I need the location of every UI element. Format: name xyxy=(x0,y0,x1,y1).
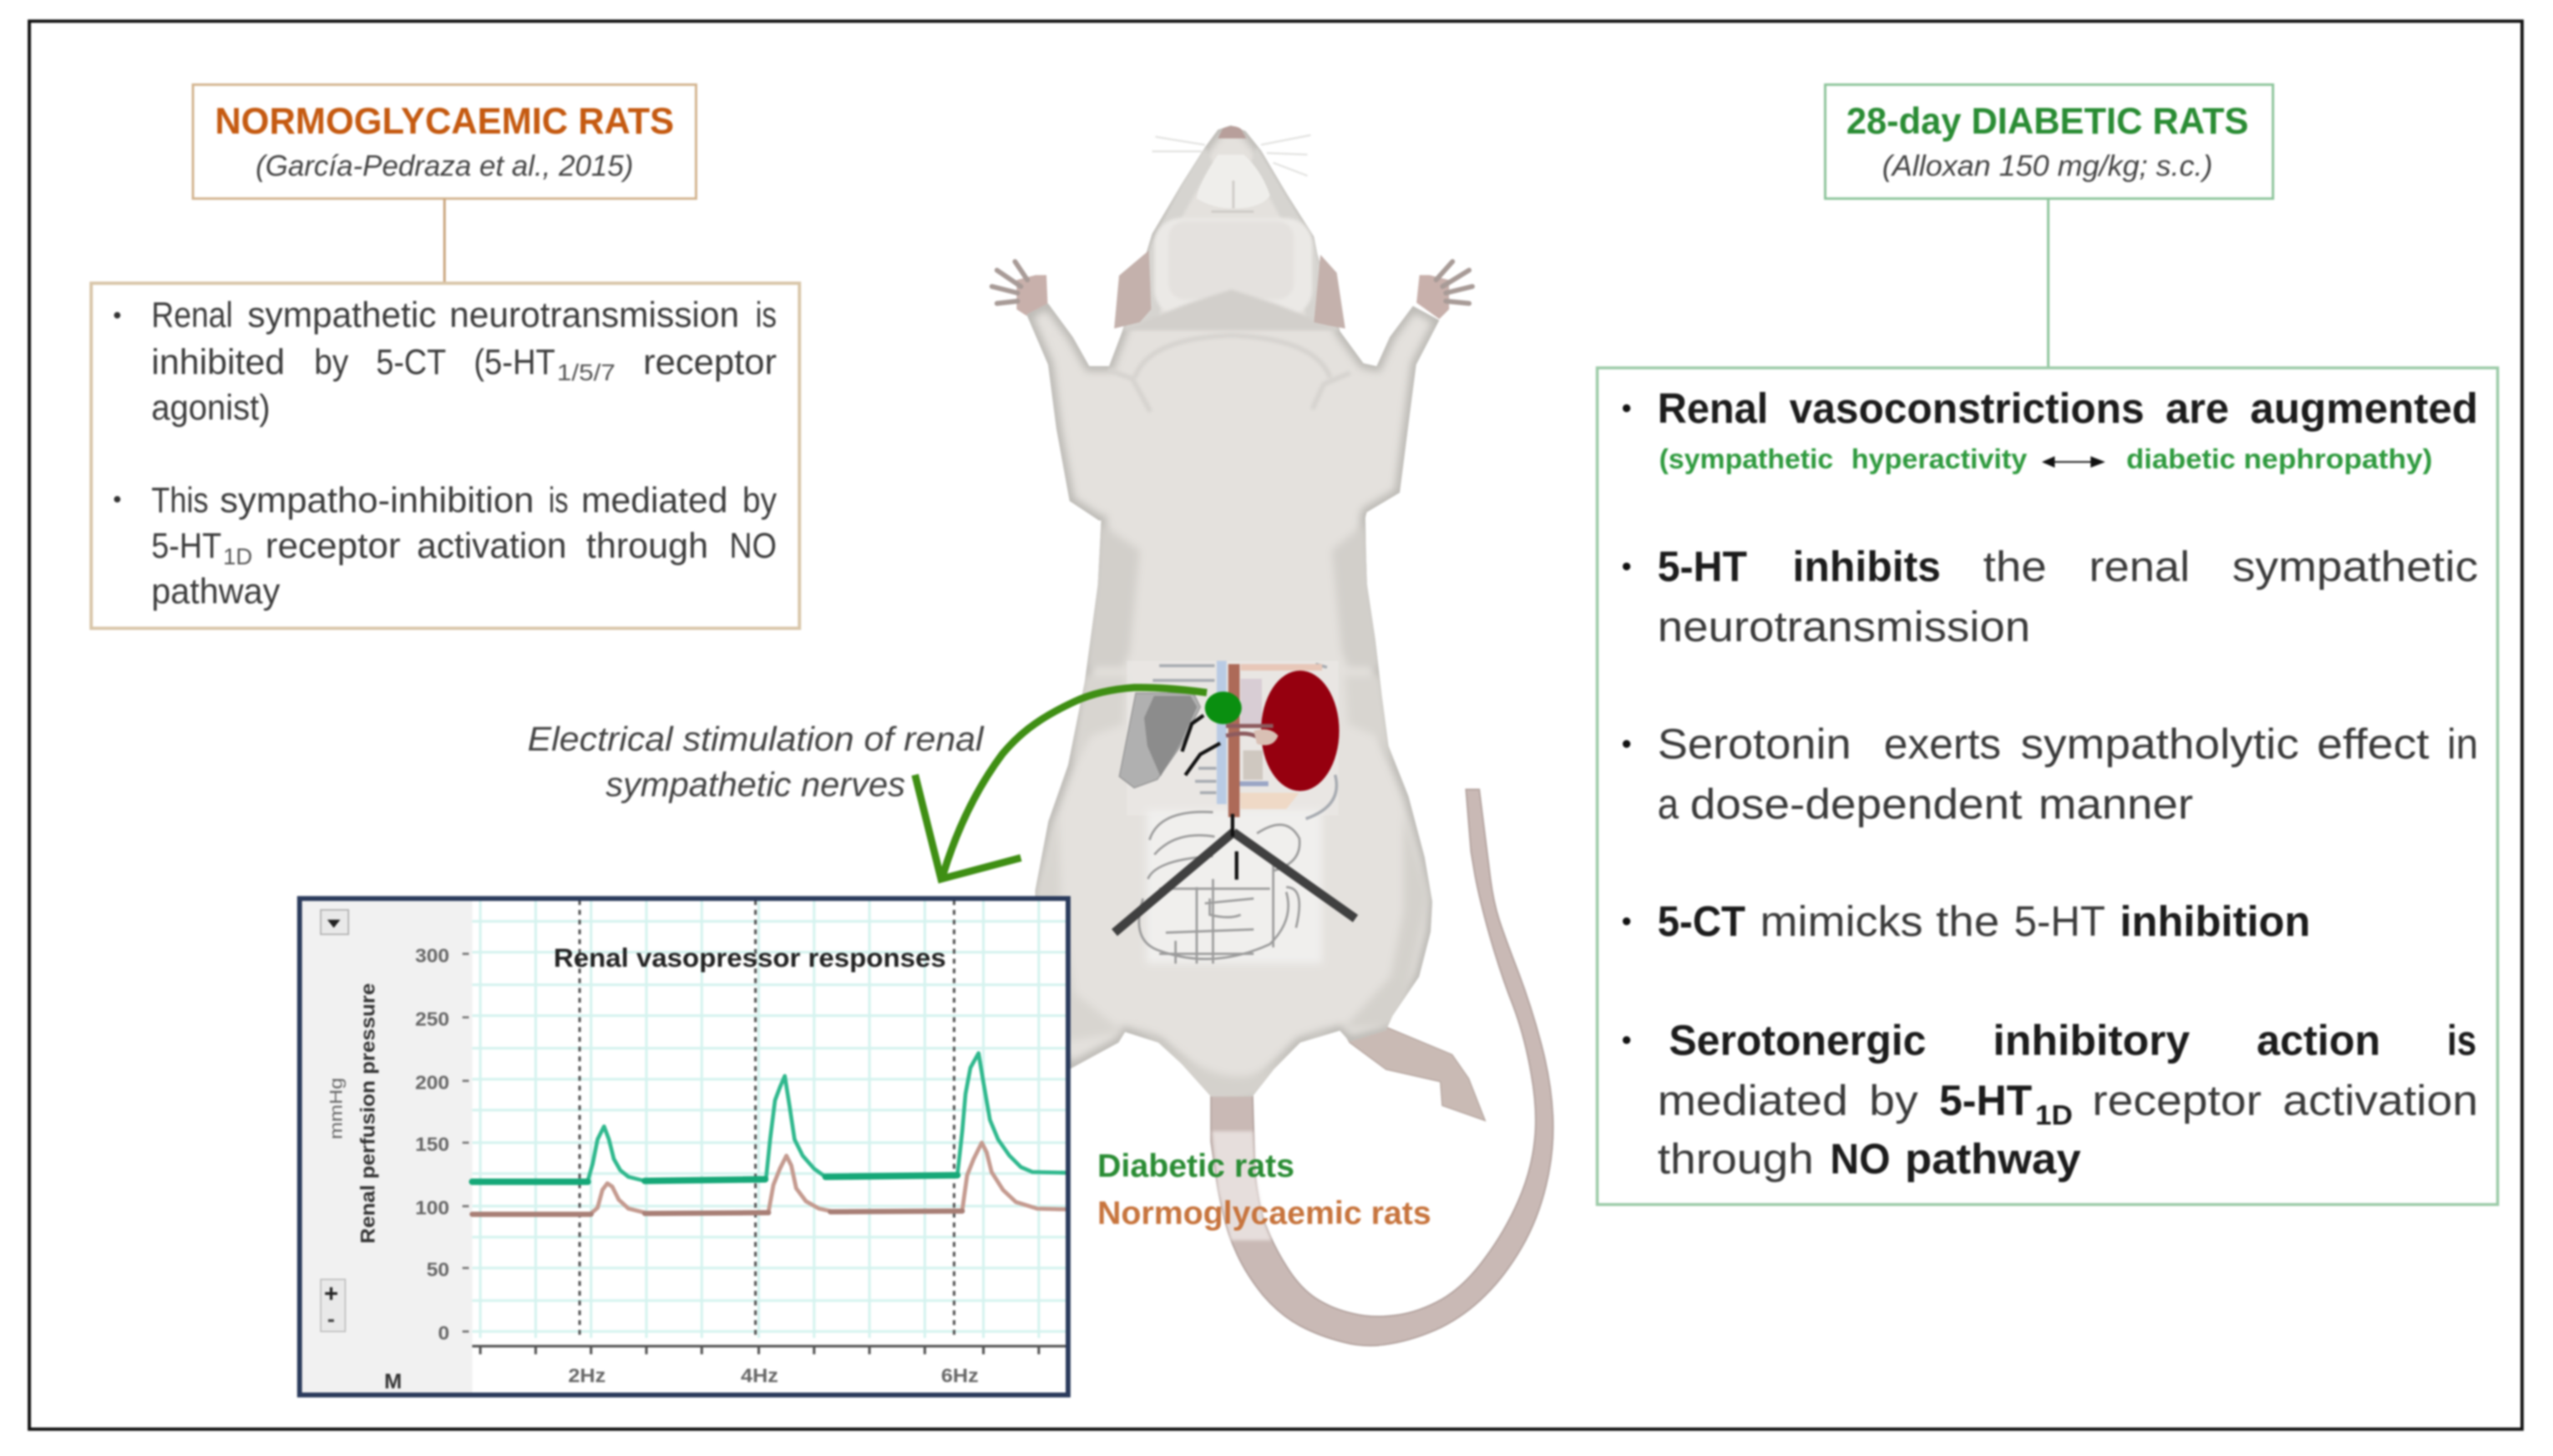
liver xyxy=(1119,693,1200,788)
bullet 1 text xyxy=(114,295,777,427)
chart left gutter xyxy=(301,900,472,1393)
finding 1: hyperactivity xyxy=(1851,444,2028,475)
bullet 1 text: 1/5/7 xyxy=(557,360,615,386)
x axis labels: 6Hz xyxy=(941,1364,979,1386)
finding 5: receptor xyxy=(2092,1077,2262,1125)
finding 5: mediated xyxy=(1658,1077,1848,1125)
finding 2: 5-HT xyxy=(1658,543,1747,590)
finding 3: a xyxy=(1658,781,1679,828)
bullet 1 text: receptor xyxy=(643,342,777,382)
arrow head xyxy=(915,775,1021,879)
finding 5: through xyxy=(1658,1135,1814,1183)
bullet 2 text: pathway xyxy=(151,572,281,612)
finding 3: effect xyxy=(2317,720,2429,768)
renal vessels xyxy=(1226,726,1274,742)
rat neck band xyxy=(1154,218,1312,316)
rat chest folds xyxy=(1109,336,1350,412)
bullet 2 text: sympatho-inhibition xyxy=(220,481,534,521)
finding 5: activation xyxy=(2282,1077,2478,1125)
aorta xyxy=(1228,664,1239,817)
callout: electrical stimulation label: sympathetic nerves xyxy=(605,765,905,803)
finding 4: 5-HT xyxy=(2014,897,2105,945)
rat body xyxy=(1026,125,1439,1097)
y axis values xyxy=(415,944,449,1344)
finding 5: action xyxy=(2257,1016,2380,1064)
panel: diabetic header xyxy=(1826,84,2273,199)
finding 3 xyxy=(1623,720,2478,828)
finding 2: renal xyxy=(2089,543,2190,590)
connector: normoglycaemic xyxy=(443,199,445,283)
alloxan dose: (Alloxan 150 mg/kg; s.c.) xyxy=(1882,150,2213,183)
x axis labels: 2Hz xyxy=(568,1364,605,1386)
illustration: abdominal organs xyxy=(1115,661,1355,963)
finding 1: are xyxy=(2165,385,2229,432)
y axis ticks xyxy=(463,954,469,1332)
scale buttons: - xyxy=(327,1306,335,1332)
chart frame xyxy=(300,898,1068,1395)
finding 5: is xyxy=(2447,1016,2476,1064)
rat tail xyxy=(1211,790,1553,1346)
rat throat xyxy=(1168,221,1294,300)
bullet 2 text: mediated xyxy=(581,481,727,521)
bullet 1 text: by xyxy=(314,342,349,382)
finding 3: exerts xyxy=(1884,720,2001,768)
bullet 1 text: 5-CT xyxy=(376,342,446,382)
finding 2: neurotransmission xyxy=(1658,603,2030,650)
panel: normoglycaemic findings xyxy=(91,283,799,629)
illustration: rat xyxy=(992,125,1553,1346)
finding 5: Serotonergic xyxy=(1669,1016,1926,1064)
y axis values: 0 xyxy=(438,1322,449,1344)
kidney xyxy=(1261,670,1340,791)
finding 3: Serotonin xyxy=(1658,720,1851,768)
finding 4: 5-CT xyxy=(1658,897,1745,945)
chart title: Renal vasopressor responses xyxy=(554,943,946,973)
finding 1: augmented xyxy=(2250,385,2478,432)
bullet 2 text: is xyxy=(549,481,568,521)
x axis xyxy=(472,1346,1066,1354)
rat neck shadow xyxy=(1122,290,1340,331)
y axis values: 150 xyxy=(415,1133,449,1155)
finding 3: in xyxy=(2447,720,2478,768)
bullet 1 text: inhibited xyxy=(151,342,285,382)
bullet 1 text: agonist) xyxy=(151,387,271,427)
finding 3: manner xyxy=(2039,781,2193,828)
bullet 2 text xyxy=(114,481,777,612)
finding 4: mimicks xyxy=(1760,897,1922,945)
rat right paw xyxy=(1416,261,1472,319)
organ upper details xyxy=(1152,664,1336,819)
callout: electrical stimulation label: Electrical stimulation of renal xyxy=(528,720,985,758)
finding 5: NO xyxy=(1830,1135,1891,1183)
finding 2: sympathetic xyxy=(2232,543,2478,590)
legend: trace colours: Normoglycaemic rats xyxy=(1097,1196,1431,1231)
chart grid xyxy=(472,900,1066,1338)
finding 1: vasoconstrictions xyxy=(1790,385,2145,432)
finding 5: 5-HT xyxy=(1939,1077,2032,1125)
vena cava xyxy=(1217,661,1227,804)
bullet 1 text: is xyxy=(756,295,777,335)
bullet 2 text: 5-HT xyxy=(151,526,221,566)
green stimulation arrow xyxy=(915,687,1242,879)
stimulation markers xyxy=(580,900,954,1338)
bullet 2 text: through xyxy=(586,526,708,566)
bullet 2 text: NO xyxy=(729,526,777,566)
x axis labels xyxy=(568,1364,979,1386)
rat body shading xyxy=(1026,125,1439,1107)
bullet 2 text: by xyxy=(742,481,777,521)
finding 5: pathway xyxy=(1905,1135,2081,1183)
rat right foot xyxy=(1340,1025,1485,1120)
finding 5: 1D xyxy=(2035,1100,2073,1131)
x axis labels: 4Hz xyxy=(741,1364,778,1386)
central nerve xyxy=(1233,814,1237,880)
finding 5: inhibitory xyxy=(1993,1016,2190,1064)
finding 2 xyxy=(1623,543,2478,650)
finding 4 xyxy=(1623,897,2311,945)
trace: diabetic xyxy=(472,1053,1066,1181)
chart: renal vasopressor responses xyxy=(300,898,1068,1395)
bullet 2 text: This xyxy=(151,481,209,521)
heading: normoglycaemic rats: NORMOGLYCAEMIC RATS xyxy=(215,99,674,142)
bullet 1 text: (5-HT xyxy=(474,342,555,382)
finding 2: inhibits xyxy=(1793,543,1941,590)
bullet 1 text: Renal xyxy=(151,295,233,335)
y axis values: 250 xyxy=(415,1008,449,1029)
organ background upper xyxy=(1127,661,1339,816)
bullet 1 text: neurotransmission xyxy=(449,295,739,335)
bullet 2 text: activation xyxy=(417,526,566,566)
connector: diabetic xyxy=(2048,199,2049,368)
y axis values: 200 xyxy=(415,1071,449,1093)
rat left foot xyxy=(1042,1025,1125,1074)
panel: normoglycaemic header xyxy=(193,84,696,199)
citation: (García-Pedraza et al., 2015) xyxy=(256,150,633,183)
rat nose xyxy=(1218,126,1246,139)
finding 1 xyxy=(1623,385,2478,475)
intestines xyxy=(1139,812,1299,963)
finding 2: the xyxy=(1983,543,2047,590)
heading: 28-day diabetic rats: 28-day DIABETIC RATS xyxy=(1846,99,2248,142)
bullet 1 text: sympathetic xyxy=(247,295,436,335)
finding 1: diabetic xyxy=(2126,444,2236,475)
sympathetic nerve fibres xyxy=(1182,715,1220,775)
legend: trace colours: Diabetic rats xyxy=(1097,1149,1294,1185)
renal hilum xyxy=(1254,729,1278,746)
callout: electrical stimulation label xyxy=(528,720,985,803)
scale buttons: + xyxy=(324,1282,338,1308)
panel: diabetic findings xyxy=(1598,368,2498,1205)
finding 3: dose-dependent xyxy=(1690,781,2022,828)
scale buttons xyxy=(321,910,348,1332)
finding 1: Renal xyxy=(1658,385,1768,432)
rat whiskers xyxy=(1152,135,1310,176)
arrow curve xyxy=(943,687,1207,876)
iliac branches xyxy=(1115,832,1355,933)
finding 1: nephropathy) xyxy=(2244,444,2433,475)
double-headed arrow xyxy=(2042,456,2105,468)
liver inner lobe xyxy=(1144,695,1197,776)
rat mouth xyxy=(1212,180,1254,211)
rat tail pale section xyxy=(1212,1131,1272,1241)
rat left paw xyxy=(992,261,1048,316)
lower coloured tissue xyxy=(1240,793,1299,809)
y axis values: 300 xyxy=(415,944,449,966)
finding 5: by xyxy=(1869,1077,1918,1125)
tissue panels beside aorta xyxy=(1239,664,1322,786)
finding 1: (sympathetic xyxy=(1659,444,1833,475)
stimulation site xyxy=(1205,691,1242,724)
rat ears xyxy=(1114,250,1345,328)
bullet 2 text: receptor xyxy=(266,526,401,566)
trace: normoglycaemic xyxy=(472,1143,1066,1214)
y axis values: 50 xyxy=(427,1259,449,1281)
finding 3: sympatholytic xyxy=(2020,720,2299,768)
organ background lower xyxy=(1147,811,1322,963)
rat muzzle xyxy=(1197,154,1270,209)
y axis title: Renal perfusion pressure xyxy=(357,983,379,1244)
finding 4: inhibition xyxy=(2120,897,2311,945)
finding 5 xyxy=(1623,1016,2478,1183)
y axis unit: mmHg xyxy=(326,1078,346,1140)
bullet 2 text: 1D xyxy=(223,543,252,569)
finding 4: the xyxy=(1936,897,1999,945)
y axis values: 100 xyxy=(415,1196,449,1218)
mode label: M xyxy=(384,1370,402,1393)
legend: trace colours xyxy=(1097,1149,1431,1231)
